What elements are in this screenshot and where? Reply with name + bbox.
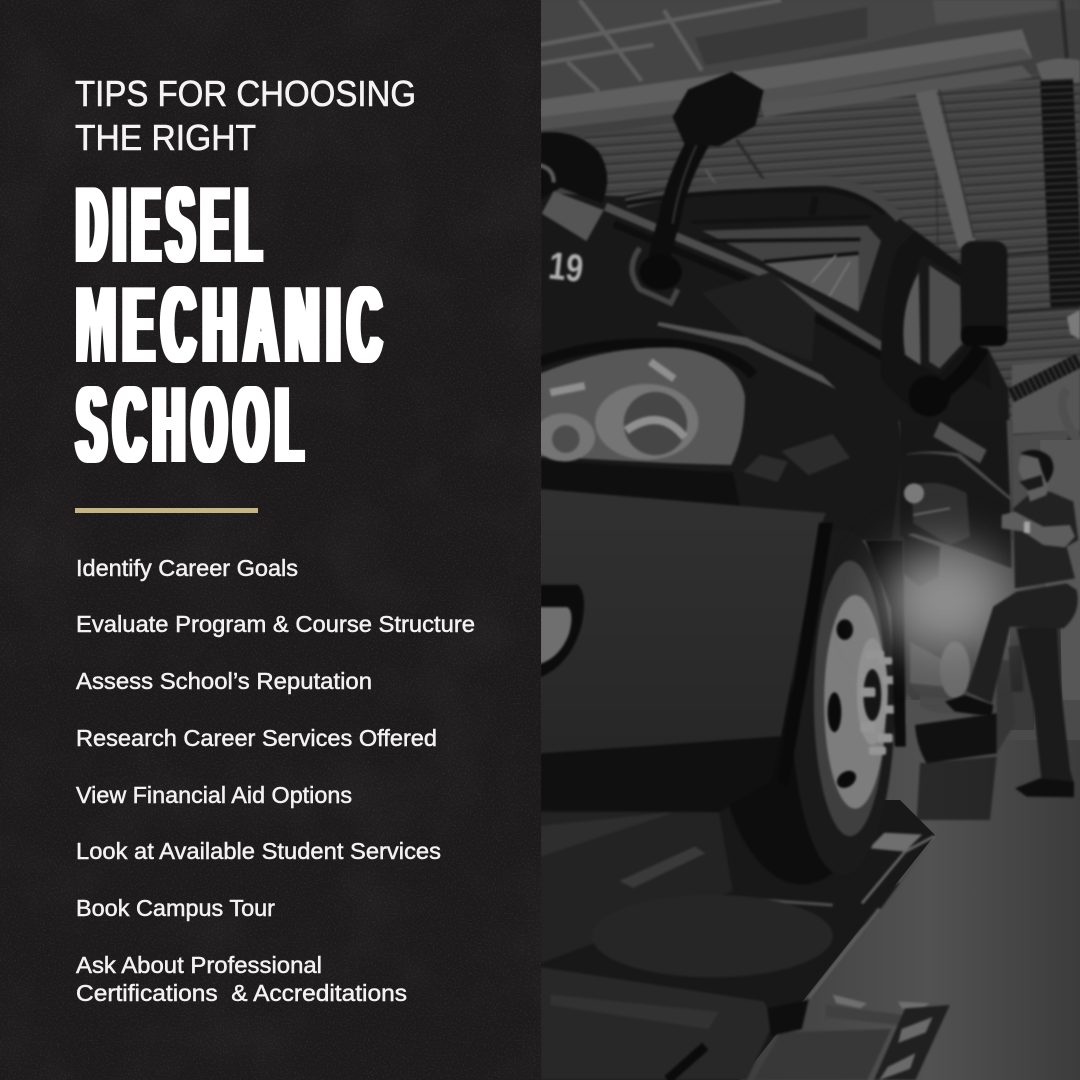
icon: front tire and rim bbox=[714, 526, 897, 884]
icon: mechanic climbing onto truck bbox=[945, 450, 1078, 797]
photo: bumper, fog light, wheel and lift bbox=[540, 523, 950, 1080]
photo: truck cab and hood bbox=[533, 71, 1013, 540]
reflections on hood bbox=[743, 434, 850, 482]
gold divider bbox=[75, 508, 258, 513]
roof visor rail bbox=[626, 181, 900, 219]
light glow behind mechanic bbox=[883, 548, 1007, 652]
list: school selection tips: Evaluate Program & Course Structure bbox=[76, 611, 475, 637]
bumper panel bbox=[540, 523, 826, 812]
icon: left side mirror on arm bbox=[632, 71, 764, 303]
mechanic's forearm bbox=[1002, 512, 1075, 547]
title: diesel mechanic school: DIESEL bbox=[77, 165, 268, 286]
mechanic's neck and face bbox=[1018, 453, 1048, 502]
heading: tips for choosing the right bbox=[75, 73, 416, 158]
mechanic's standing leg bbox=[1017, 625, 1073, 782]
hood reflection bbox=[540, 322, 988, 540]
left visor and bracket bbox=[540, 132, 607, 241]
panel: truck workshop photo bbox=[533, 0, 1080, 1080]
list: school selection tips: Assess School’s Reputation bbox=[76, 668, 372, 694]
hood edge highlight bbox=[605, 207, 884, 348]
photo: ceiling, ducts and hoses bbox=[540, 0, 1080, 540]
heading: tips for choosing the right: TIPS FOR CHOOSING bbox=[75, 73, 416, 114]
list: school selection tips: Certifications & Accreditations bbox=[76, 980, 407, 1006]
list: school selection tips: Book Campus Tour bbox=[76, 895, 275, 921]
mechanic's shirt bbox=[1013, 492, 1078, 588]
title: diesel mechanic school: MECHANIC bbox=[77, 263, 389, 385]
list: school selection tips bbox=[76, 555, 475, 1006]
number on cab: 19 bbox=[547, 244, 585, 291]
list: school selection tips: View Financial Aid Options bbox=[76, 782, 352, 808]
fog light bbox=[540, 585, 584, 678]
heading: tips for choosing the right: THE RIGHT bbox=[75, 117, 256, 158]
panel: dark textured text panel bbox=[0, 0, 541, 1080]
mechanic's bent leg bbox=[967, 583, 1078, 703]
windshield bbox=[692, 217, 881, 312]
photo: rear axle, fuel tank and step bbox=[900, 420, 1023, 820]
photo: floor and background behind wheel bbox=[540, 440, 1080, 1080]
headlight bbox=[533, 347, 745, 465]
icon: overhead corrugated hose bbox=[1036, 58, 1080, 307]
wheel arch bbox=[778, 523, 833, 788]
list: school selection tips: Identify Career Goals bbox=[76, 555, 298, 581]
list: school selection tips: Research Career Services Offered bbox=[76, 725, 437, 751]
mechanic's hair bbox=[1020, 450, 1053, 483]
title: diesel mechanic school: SCHOOL bbox=[77, 363, 310, 486]
list: school selection tips: Look at Available Student Services bbox=[76, 838, 441, 864]
icon: right side mirror on door bbox=[881, 231, 1007, 417]
list: school selection tips: Ask About Professional bbox=[76, 952, 322, 978]
lift platform bbox=[540, 812, 950, 1080]
mechanic's boots bbox=[1015, 778, 1074, 797]
title: diesel mechanic school bbox=[77, 165, 389, 486]
